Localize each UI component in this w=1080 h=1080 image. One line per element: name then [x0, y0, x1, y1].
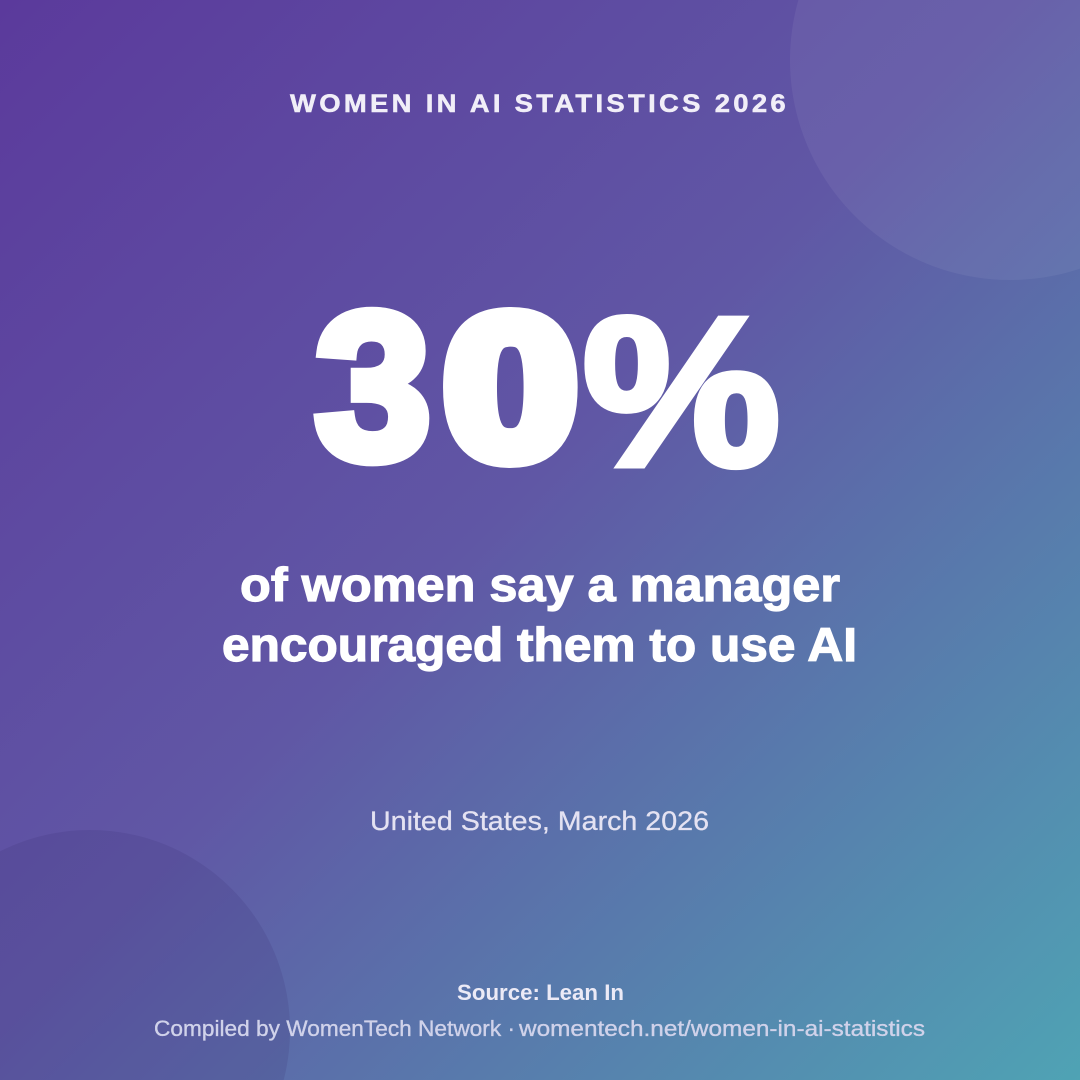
location and date: United States, March 2026 — [370, 806, 709, 836]
big statistic: 30% — [315, 271, 780, 511]
decorative circle: top right — [790, 0, 1080, 280]
statistic description — [222, 558, 857, 671]
big statistic: 30%: % — [583, 274, 780, 511]
statistic description: of women say a manager — [240, 558, 840, 611]
compiled by credit: womentech.net/women-in-ai-statistics — [518, 1016, 925, 1041]
big statistic: 30%: 0 — [444, 274, 577, 500]
compiled by credit: Compiled by WomenTech Network · — [154, 1016, 515, 1041]
source: Source: Lean In — [457, 980, 624, 1005]
big statistic: 30%: 3 — [315, 271, 431, 503]
compiled by credit — [154, 1016, 925, 1041]
title: WOMEN IN AI STATISTICS 2026 — [290, 90, 789, 118]
statistic description: encouraged them to use AI — [222, 618, 857, 671]
decorative circle: bottom left — [0, 830, 290, 1080]
